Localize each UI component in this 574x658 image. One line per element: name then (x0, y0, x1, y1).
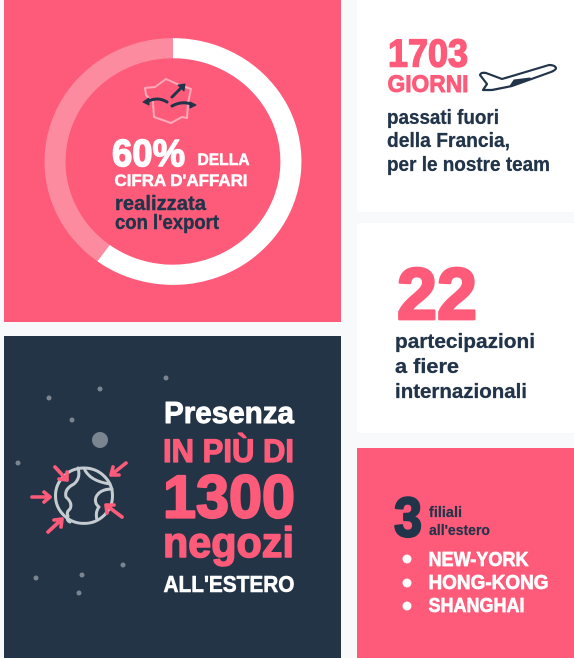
icon: France map with arrows (143, 79, 196, 123)
text: in più di 1300 negozi (163, 433, 295, 567)
stat: 1703 giorni: GIORNI (388, 71, 468, 98)
text: 60% della cifra d'affari: 60% (112, 133, 185, 175)
text: passati fuori della Francia: della Francia, (387, 130, 510, 152)
text: 60% della cifra d'affari: CIFRA D'AFFARI (114, 172, 248, 190)
text: presenza: Presenza (164, 395, 295, 430)
text: 60% della cifra d'affari (112, 133, 250, 190)
text: in più di 1300 negozi: negozi (163, 519, 294, 567)
text: in più di 1300 negozi: IN PIÙ DI (163, 433, 294, 469)
text: realizzata con l'export: con l'export (115, 212, 219, 234)
panel: trade fairs (357, 223, 574, 433)
text: in più di 1300 negozi: 1300 (163, 464, 295, 530)
list: cities: SHANGHAI (428, 595, 524, 617)
text: passati fuori della Francia: per le nostre team (387, 154, 550, 176)
list: cities: HONG-KONG (428, 572, 548, 594)
stat: 1703 giorni (388, 32, 468, 98)
stat: 1703 giorni: 1703 (388, 32, 468, 76)
stat: 22: 22 (397, 254, 477, 335)
text: realizzata con l'export (115, 193, 219, 234)
stat: 3: 3 (394, 486, 422, 548)
text: 60% della cifra d'affari: DELLA (198, 151, 250, 169)
text: passati fuori della Francia: passati fuori (387, 107, 499, 129)
list: cities (402, 549, 548, 617)
text: partecipazioni a fiere internazionali: a fiere (395, 356, 459, 378)
donut chart: 60 percent (55, 48, 291, 275)
panel: foreign subsidiaries (357, 448, 574, 658)
star dots (16, 376, 168, 596)
text: partecipazioni a fiere internazionali: partecipazioni (395, 331, 535, 353)
text: all'estero: ALL'ESTERO (164, 571, 294, 597)
text: filiali all'estero (429, 504, 490, 539)
panel: export share (4, 0, 341, 322)
text: partecipazioni a fiere internazionali (395, 331, 535, 403)
text: passati fuori della Francia (387, 107, 550, 176)
text: filiali all'estero: filiali (429, 504, 462, 521)
text: filiali all'estero: all'estero (429, 522, 490, 539)
list: cities: NEW-YORK (428, 549, 529, 571)
text: partecipazioni a fiere internazionali: internazionali (395, 381, 527, 403)
text: realizzata con l'export: realizzata (115, 193, 207, 215)
panel: days abroad (357, 0, 574, 212)
panel: presence abroad (4, 336, 341, 658)
icon: airplane (480, 65, 556, 90)
icon: globe with arrows (32, 463, 126, 532)
